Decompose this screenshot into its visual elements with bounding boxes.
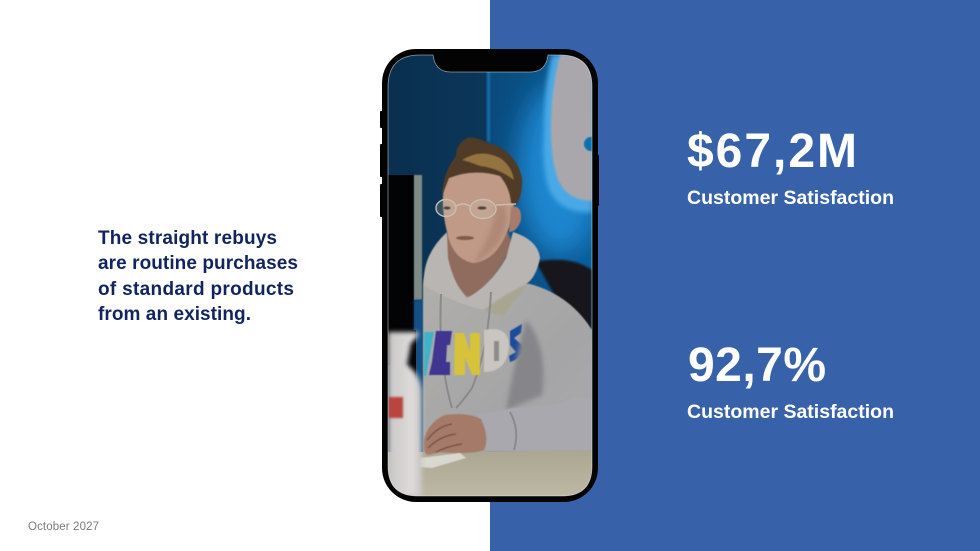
sweatshirt xyxy=(423,268,592,462)
stat: revenue: $67,2M xyxy=(687,125,857,178)
body text: are routine purchases xyxy=(98,253,298,274)
drawstrings xyxy=(440,292,491,408)
stat: percentage: 92,7% xyxy=(688,339,826,392)
arm shadow and sleeve xyxy=(506,320,543,410)
hood collar xyxy=(424,232,540,310)
wall glow xyxy=(518,85,602,255)
side buttons xyxy=(380,111,599,217)
body text: from an existing. xyxy=(98,304,251,325)
stat: percentage xyxy=(687,339,894,423)
head xyxy=(443,160,514,263)
ear xyxy=(509,207,521,232)
body text: of standard products xyxy=(98,279,294,300)
phone body xyxy=(382,49,598,502)
hair xyxy=(442,137,522,205)
grey wall panel xyxy=(551,55,592,201)
phone mockup xyxy=(380,49,602,502)
shirt lettering xyxy=(424,324,522,376)
keyboard xyxy=(420,453,466,468)
body text xyxy=(98,228,298,325)
hand xyxy=(423,414,486,455)
stat: percentage: Customer Satisfaction xyxy=(687,401,894,423)
screen edge highlight xyxy=(388,55,592,496)
body text: The straight rebuys xyxy=(98,228,277,249)
neck xyxy=(446,230,512,298)
monitor xyxy=(388,175,414,365)
eyes and mouth xyxy=(444,206,486,240)
stat: revenue xyxy=(687,125,894,209)
photo: man at desk xyxy=(388,55,602,496)
stat: revenue: Customer Satisfaction xyxy=(687,187,894,209)
date footer: October 2027 xyxy=(28,521,99,533)
chair xyxy=(536,260,592,345)
desk xyxy=(388,450,592,496)
cheek shading xyxy=(478,206,507,260)
blue right panel xyxy=(490,0,980,551)
bottle xyxy=(388,332,422,496)
glasses xyxy=(436,200,516,218)
